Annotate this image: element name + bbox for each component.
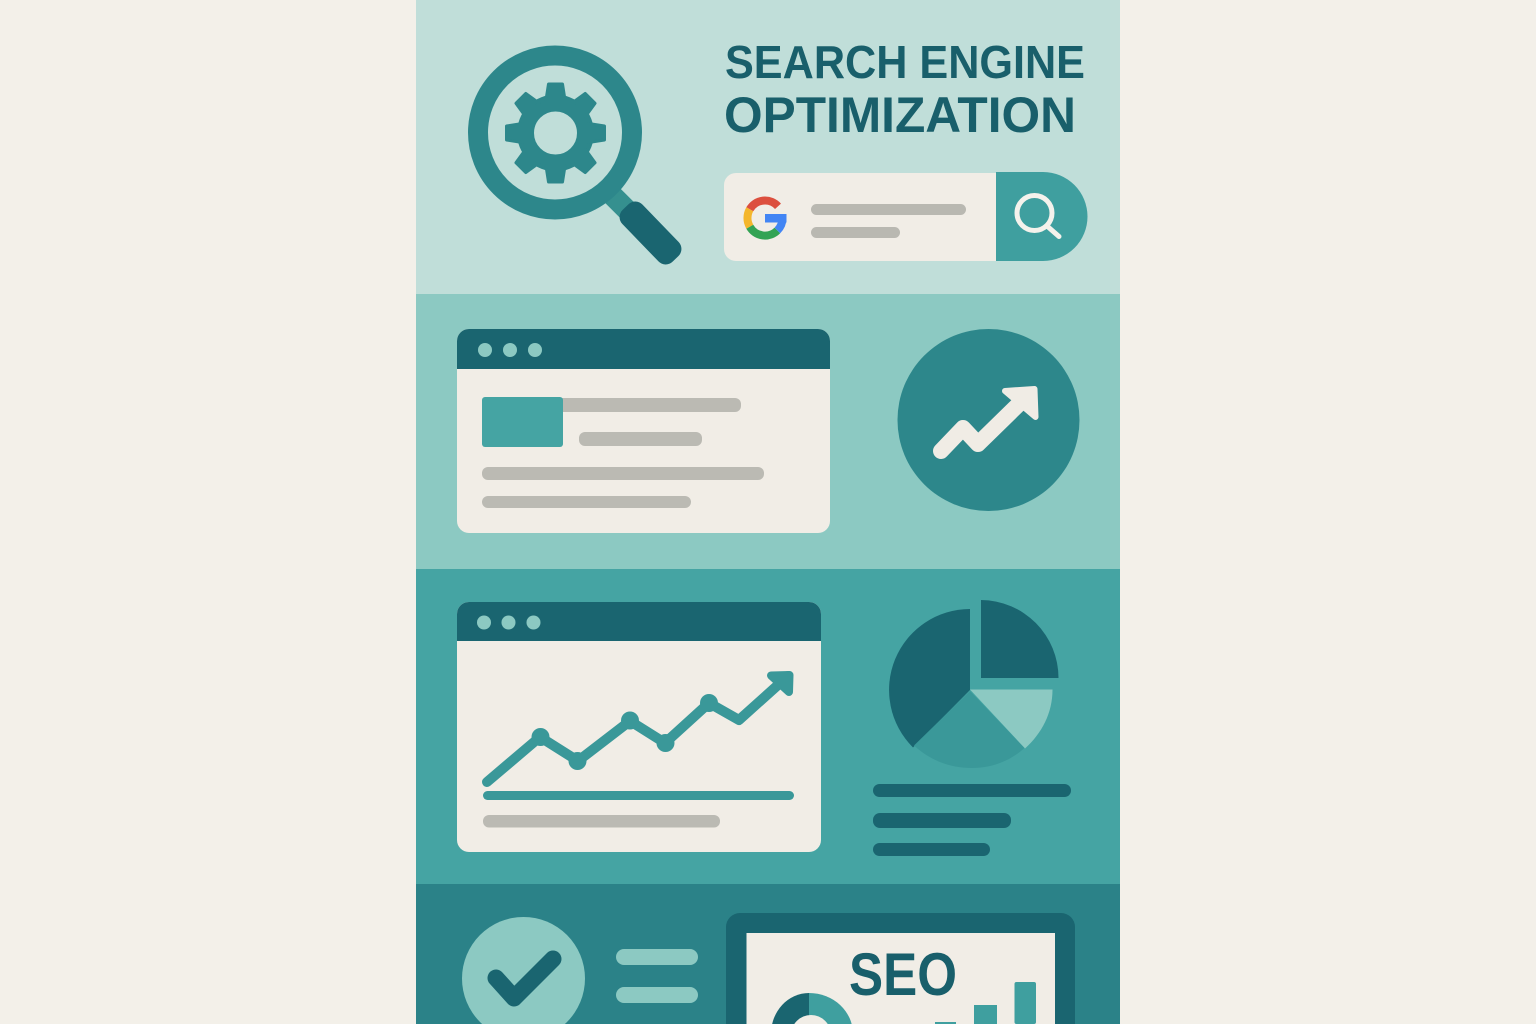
monitor xyxy=(726,913,1075,1024)
panel: third band xyxy=(416,569,1120,884)
pie chart xyxy=(889,600,1058,768)
bar chart xyxy=(935,982,1036,1024)
icon: google G xyxy=(747,200,786,236)
title: OPTIMIZATION xyxy=(724,87,1076,143)
title: SEARCH ENGINE xyxy=(725,36,1085,88)
search bar xyxy=(724,172,1088,261)
line chart xyxy=(487,675,790,782)
browser window: page layout xyxy=(457,329,830,533)
panel: second band xyxy=(416,294,1120,569)
donut chart xyxy=(771,993,853,1024)
icon: magnifier with gear xyxy=(478,56,686,269)
browser window: line chart xyxy=(457,602,821,852)
title xyxy=(724,36,1085,143)
text lines xyxy=(873,784,1071,856)
list bars xyxy=(616,949,698,1003)
panel: fourth band xyxy=(416,884,1120,1024)
icon: check circle xyxy=(462,917,585,1024)
panel: header band xyxy=(416,0,1120,294)
icon: search xyxy=(1017,196,1059,236)
icon: growth arrow circle xyxy=(898,329,1080,511)
SEO label: SEO xyxy=(849,941,957,1008)
